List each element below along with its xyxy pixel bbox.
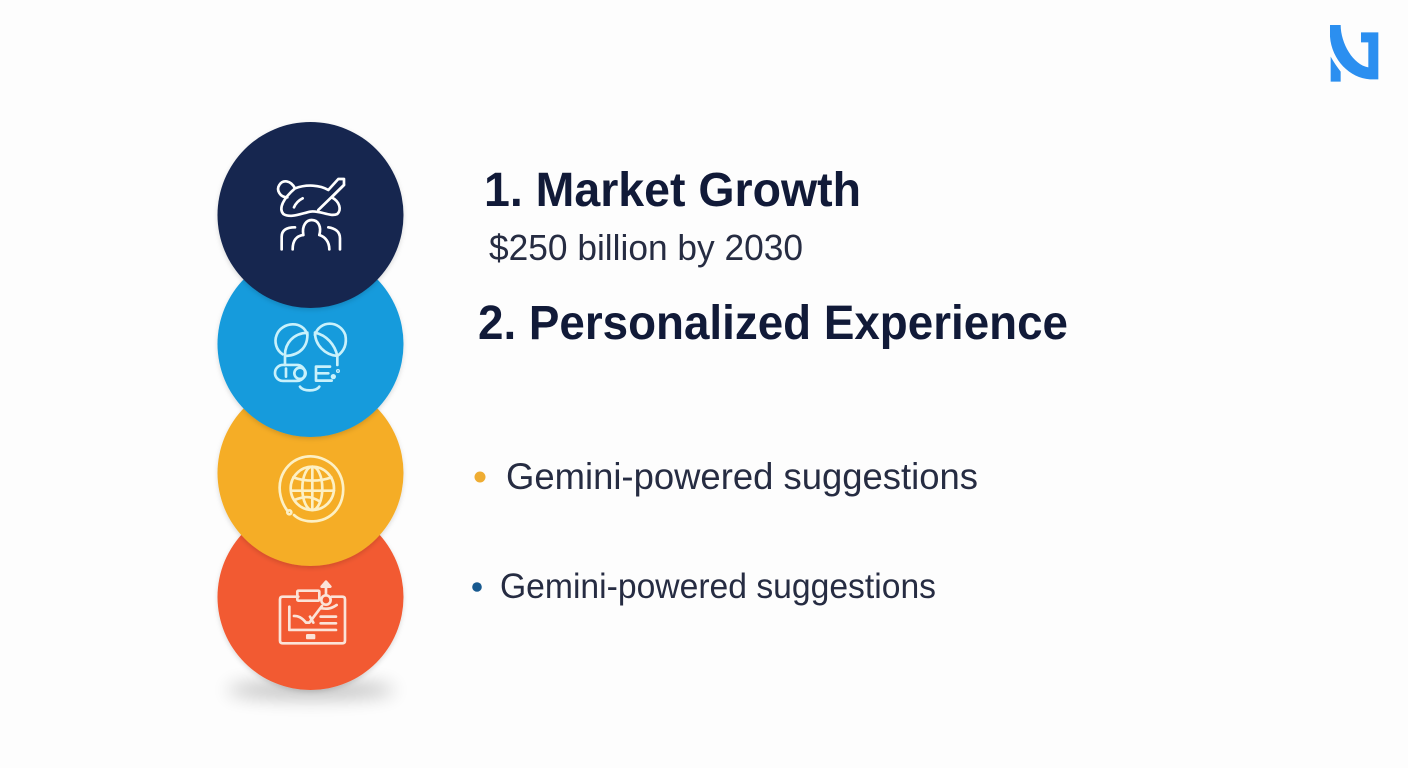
ground shadow <box>227 681 395 699</box>
stacked circle column <box>218 122 404 699</box>
heading: 1. Market Growth: 1. Market Growth <box>484 164 861 217</box>
circle 3: yellow with globe icon <box>218 380 404 566</box>
heading: 2. Personalized Experience: 2. Personalized Experience <box>478 297 1068 350</box>
text: market size: $250 billion by 2030 <box>489 227 803 268</box>
bullet 1: Gemini-powered suggestions <box>506 456 978 497</box>
bullet 2: Gemini-powered suggestions <box>500 567 936 606</box>
logo <box>1330 25 1378 82</box>
circle 1: navy with growth icon <box>218 122 404 308</box>
circle 4: red with tablet icon <box>218 504 404 690</box>
circle 2: blue with face icon <box>218 251 404 437</box>
